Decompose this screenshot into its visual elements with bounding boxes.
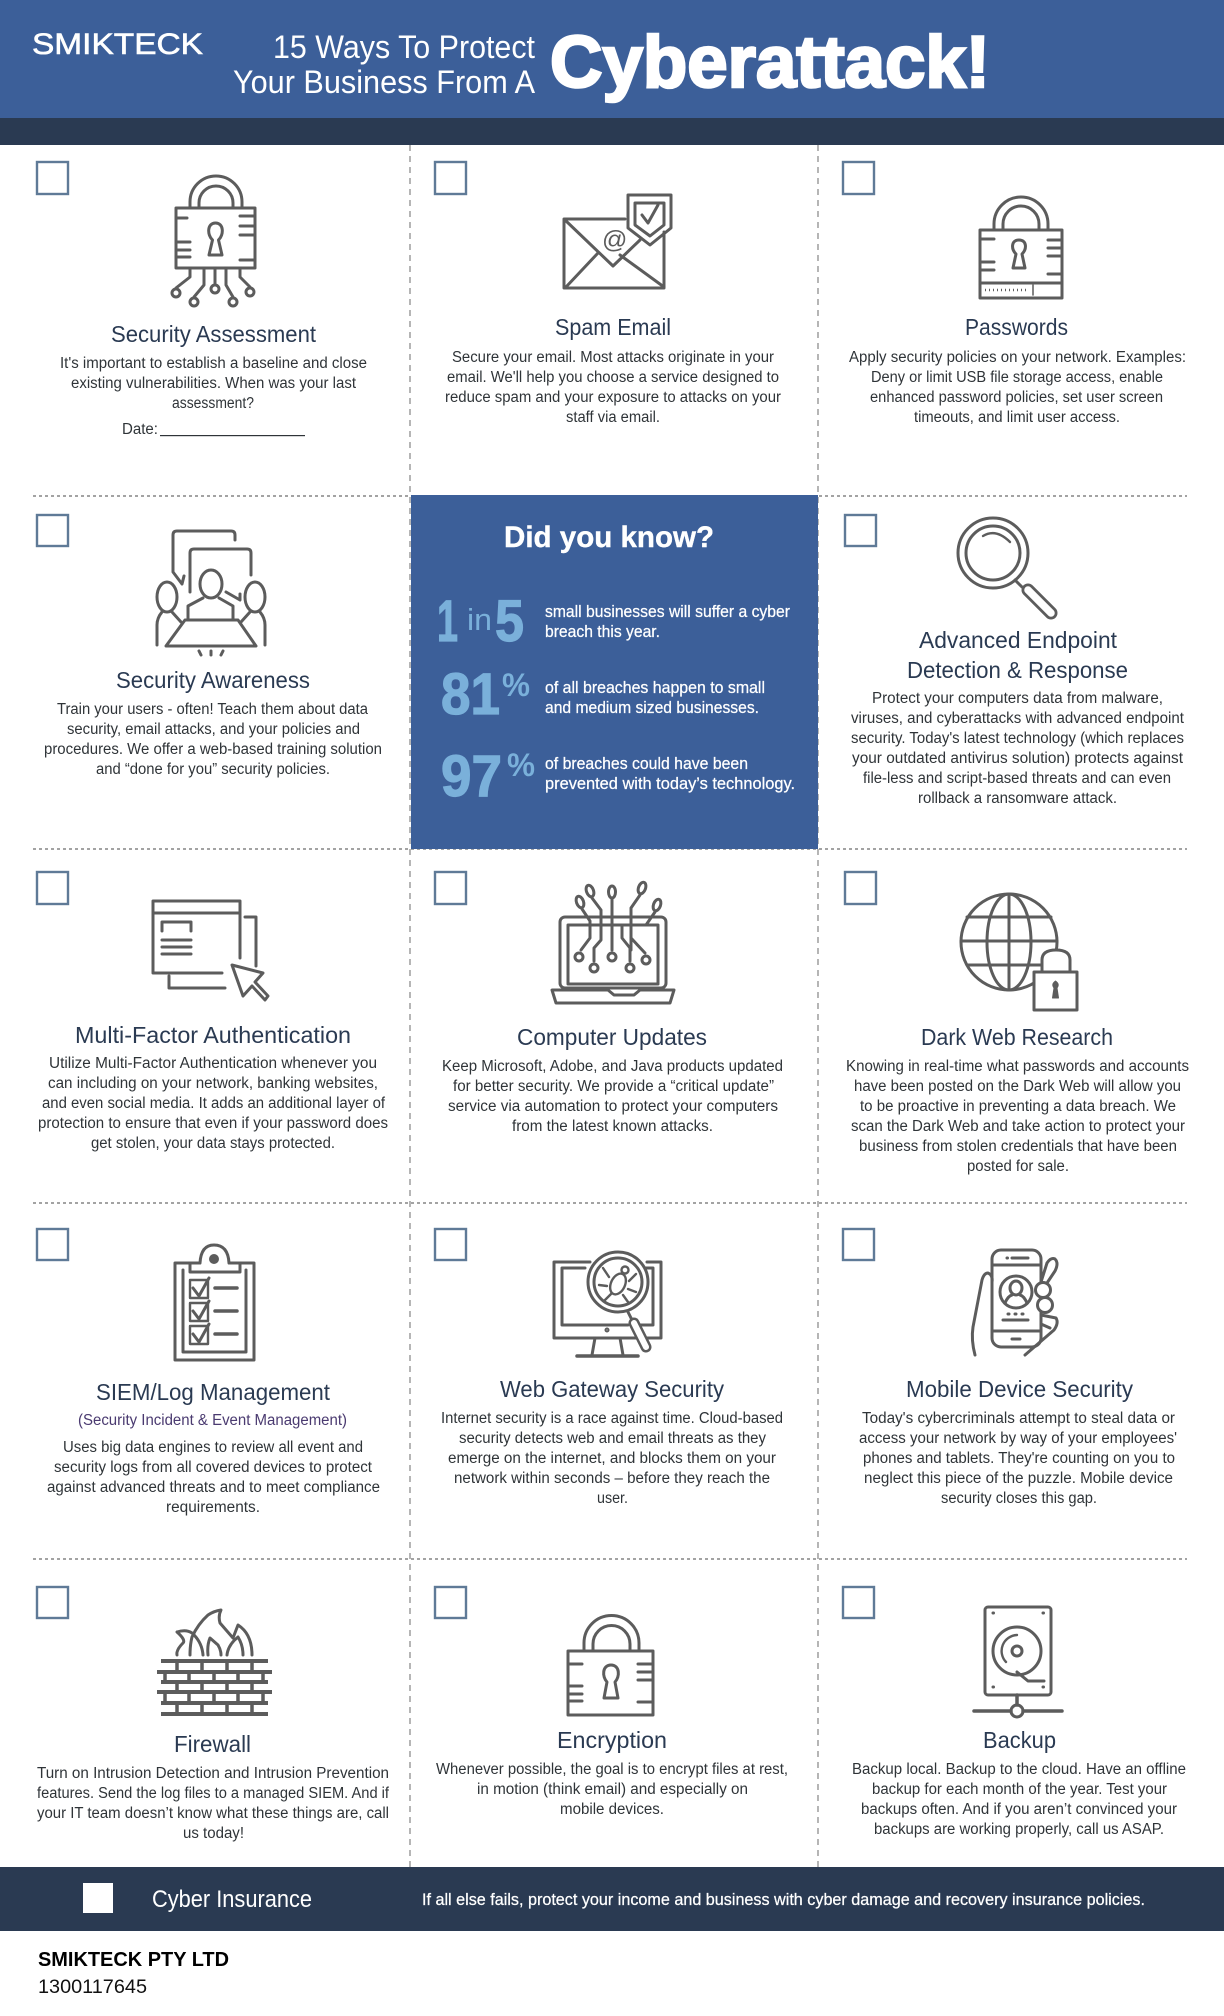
heading: Computer Updates [517,1024,707,1050]
title [233,22,990,103]
stat: 97%: prevented with today’s technology. [545,774,795,793]
icon: magnifying glass [958,518,1051,613]
stat: 1 in 5: breach this year. [545,622,660,641]
subheading: (Security Incident & Event Management) [78,1412,347,1429]
stat: 97%: 97 [441,744,502,809]
panel: advanced endpoint detection and response [845,515,1185,807]
title: 15 Ways To Protect [273,29,535,65]
stat: 1 in 5: small businesses will suffer a cyber [545,602,790,621]
body text: Date: [122,421,158,438]
body text: security. Today's latest technology (which replaces [851,730,1184,747]
body text: from the latest known attacks. [512,1118,713,1135]
stat: 81%: % [502,667,530,703]
body text: and “done for you” security policies. [96,761,330,778]
body text: security detects web and email threats as they [459,1430,766,1447]
stat: 81%: 81 [441,662,500,727]
title: Your Business From A [233,64,536,100]
body text: scan the Dark Web and take action to protect your [851,1118,1185,1135]
footer contact: SMIKTECK PTY LTD [38,1949,229,1971]
panel: did you know [411,495,818,849]
body text [846,1058,1189,1175]
icon: monitor with bug under magnifier [554,1252,661,1356]
body text: features. Send the log files to a managed SIEM. And if [37,1785,390,1802]
body text: file-less and script-based threats and can even [863,770,1171,787]
panel: computer updates [435,872,783,1135]
panel: spam email [435,162,781,426]
body text [47,1439,380,1516]
icon: brick wall with flames [157,1610,272,1714]
body text: backups often. And if you aren’t convinced your [861,1801,1177,1818]
body text [852,1761,1186,1838]
panel: security awareness [37,515,382,778]
heading: Backup [983,1727,1056,1753]
heading: Did you know? [504,521,714,554]
body text: to be proactive in preventing a data breach. We [860,1098,1176,1115]
body text: your outdated antivirus solution) protects against [852,750,1184,767]
icon: padlock [568,1616,653,1715]
body text: assessment? [172,395,254,412]
body text: against advanced threats and to meet compliance [47,1479,380,1496]
panel: firewall [37,1587,390,1842]
body text: can including on your network, banking websites, [48,1075,378,1092]
body text: viruses, and cyberattacks with advanced endpoint [851,710,1185,727]
body text [851,690,1185,807]
panel: dark web research [845,872,1189,1175]
panel: cyber insurance banner [0,1867,1224,1931]
body text [849,349,1186,426]
body text: security logs from all covered devices to protect [54,1459,373,1476]
body text: security, email attacks, and your policies and [67,721,360,738]
body text: Secure your email. Most attacks originate in your [452,349,774,366]
heading: Cyber Insurance [152,1886,312,1913]
heading: Mobile Device Security [906,1376,1133,1402]
heading: Multi-Factor Authentication [75,1022,351,1048]
body text: email. We'll help you choose a service designed to [447,369,779,386]
body text: your IT team doesn’t know what these things are, call [37,1805,389,1822]
stat: 97%: % [507,747,535,783]
icon: globe with padlock [961,894,1077,1010]
checkbox [83,1883,113,1913]
panel: multi-factor authentication [37,872,388,1152]
body text: rollback a ransomware attack. [918,790,1117,807]
stat: 81%: of all breaches happen to small [545,678,765,697]
body text: neglect this piece of the puzzle. Mobile device [864,1470,1173,1487]
panel: encryption [435,1587,788,1818]
panel: backup [843,1587,1186,1838]
footer contact [38,1949,229,1998]
icon: circuit padlock [172,176,255,306]
heading: Spam Email [555,314,671,340]
body text: procedures. We offer a web-based training solution [44,741,382,758]
body text: Backup local. Backup to the cloud. Have an offline [852,1761,1186,1778]
panel: siem log management [37,1229,380,1516]
body text: user. [597,1490,628,1507]
body text: emerge on the internet, and blocks them on your [448,1450,776,1467]
icon: people at a table [157,531,265,655]
heading: Dark Web Research [921,1024,1113,1050]
body text: for better security. We provide a “critical update” [453,1078,774,1095]
body text [436,1761,788,1818]
stat: 81% [441,662,765,727]
icon: laptop with circuits [552,881,674,1003]
stat: 1 in 5: 1 [437,589,458,654]
body text [44,701,382,778]
body text: phones and tablets. They're counting on you to [863,1450,1175,1467]
body text [38,1055,388,1152]
heading: Firewall [174,1731,251,1757]
body text: Apply security policies on your network. Examples: [849,349,1186,366]
icon: envelope with shield [564,195,671,288]
stat: 1 in 5: 5 [495,589,524,654]
stat: 97% [441,744,795,809]
body text [445,349,781,426]
banner message: If all else fails, protect your income and business with cyber damage and recovery insurance policies. [422,1890,1145,1909]
body text: us today! [183,1825,244,1842]
body text: requirements. [166,1499,260,1516]
body text: security closes this gap. [941,1490,1097,1507]
heading: Passwords [965,314,1068,340]
heading: Web Gateway Security [500,1376,724,1402]
body text: backup for each month of the year. Test your [872,1781,1167,1798]
body text [37,1765,390,1842]
body text: business from stolen credentials that have been [859,1138,1177,1155]
panel: mobile device security [843,1229,1177,1507]
body text: backups are working properly, call us ASAP. [874,1821,1164,1838]
body text: Whenever possible, the goal is to encrypt files at rest, [436,1761,788,1778]
body text: staff via email. [566,409,660,426]
body text: It's important to establish a baseline and close [60,355,367,372]
body text [60,355,367,438]
panel: passwords [843,162,1186,426]
stat: 97%: of breaches could have been [545,754,748,773]
heading [907,627,1128,683]
body text [859,1410,1177,1507]
body text: Today's cybercriminals attempt to steal data or [862,1410,1175,1427]
heading: SIEM/Log Management [96,1379,331,1405]
body text: service via automation to protect your computers [448,1098,778,1115]
panel: security assessment [37,162,367,438]
logo: SMIKTECK [32,28,203,61]
body text: Uses big data engines to review all event and [63,1439,363,1456]
body text: Train your users - often! Teach them about data [57,701,368,718]
heading: Advanced Endpoint [919,627,1118,653]
body text: timeouts, and limit user access. [914,409,1120,426]
heading: Detection & Response [907,657,1128,683]
stat: 81%: and medium sized businesses. [545,698,759,717]
body text: reduce spam and your exposure to attacks on your [445,389,781,406]
heading: Encryption [557,1727,667,1753]
body text: access your network by way of your employees' [859,1430,1177,1447]
body text: protection to ensure that even if your password does [38,1115,388,1132]
header banner [0,0,1224,145]
icon: clipboard checklist [175,1245,254,1360]
body text: existing vulnerabilities. When was your last [71,375,357,392]
heading: Security Assessment [111,321,317,347]
icon: padlock with password field [980,197,1062,298]
icon: envelope with shield: @ [602,226,627,254]
body text: Utilize Multi-Factor Authentication whenever you [49,1055,377,1072]
body text: Deny or limit USB file storage access, enable [871,369,1163,386]
body text: network within seconds – before they reach the [454,1470,770,1487]
body text [441,1410,783,1507]
body text: Protect your computers data from malware, [872,690,1163,707]
title: Cyberattack! [550,22,990,103]
icon: hard drive on network [974,1607,1062,1717]
body text: get stolen, your data stays protected. [91,1135,335,1152]
body text: enhanced password policies, set user screen [870,389,1163,406]
body text [442,1058,783,1135]
footer contact: 1300117645 [38,1977,147,1998]
heading: Security Awareness [116,667,310,693]
body text: Turn on Intrusion Detection and Intrusion Prevention [37,1765,389,1782]
body text: and even social media. It adds an additional layer of [42,1095,386,1112]
stat: 1 in 5 [437,589,790,654]
body text: posted for sale. [967,1158,1069,1175]
body text: Knowing in real-time what passwords and accounts [846,1058,1189,1075]
icon: hand holding phone [972,1250,1057,1355]
body text: mobile devices. [560,1801,664,1818]
icon: browser windows with cursor [153,901,268,1000]
body text: in motion (think email) and especially on [477,1781,748,1798]
body text: have been posted on the Dark Web will allow you [854,1078,1181,1095]
body text: Internet security is a race against time. Cloud-based [441,1410,783,1427]
panel: web gateway security [435,1229,783,1507]
stat: 1 in 5: in [467,602,492,637]
body text: Keep Microsoft, Adobe, and Java products updated [442,1058,783,1075]
